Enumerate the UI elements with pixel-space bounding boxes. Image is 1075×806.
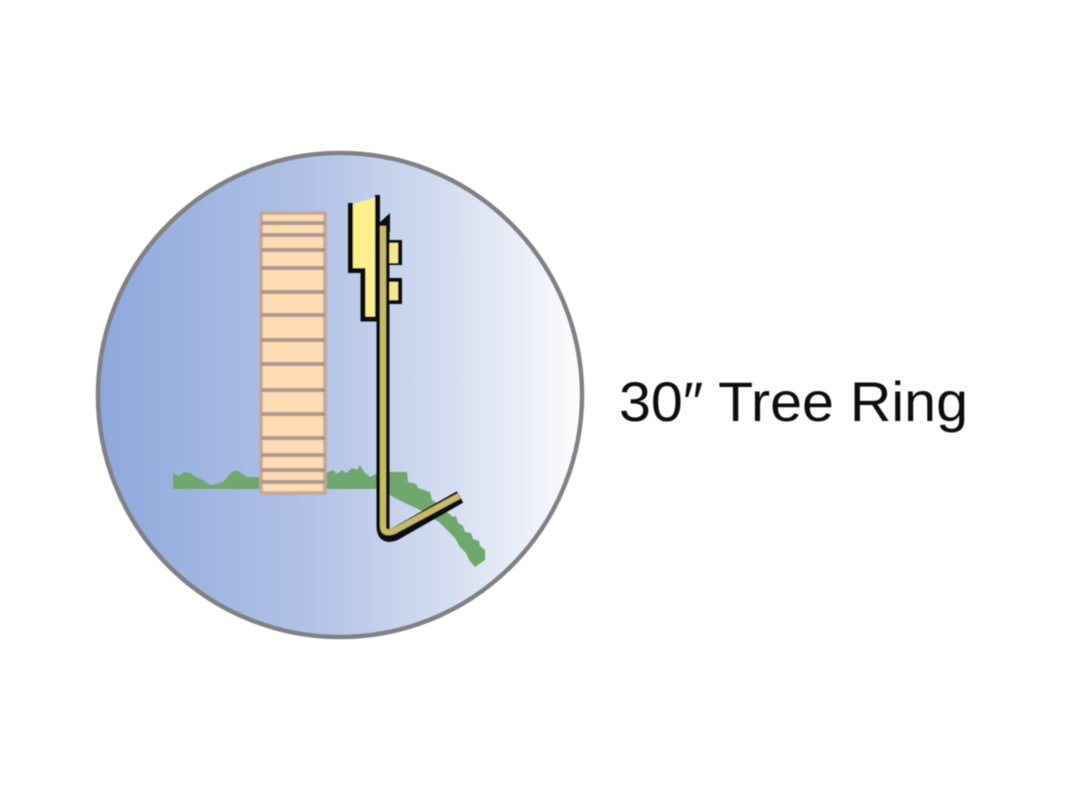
black L-shaped outline: [383, 222, 460, 535]
icon: grass ground line: [173, 465, 485, 567]
circle background: [98, 153, 582, 637]
top notch of L bracket: [378, 213, 390, 232]
label: 30 inch tree ring: 30″ Tree Ring: [619, 370, 968, 433]
small tabs: [387, 240, 402, 304]
icon: tree ring bracket: [350, 195, 460, 535]
upper yellow clip: [350, 195, 380, 320]
icon: brick wall: [261, 213, 325, 493]
olive L-shaped core: [383, 226, 459, 532]
